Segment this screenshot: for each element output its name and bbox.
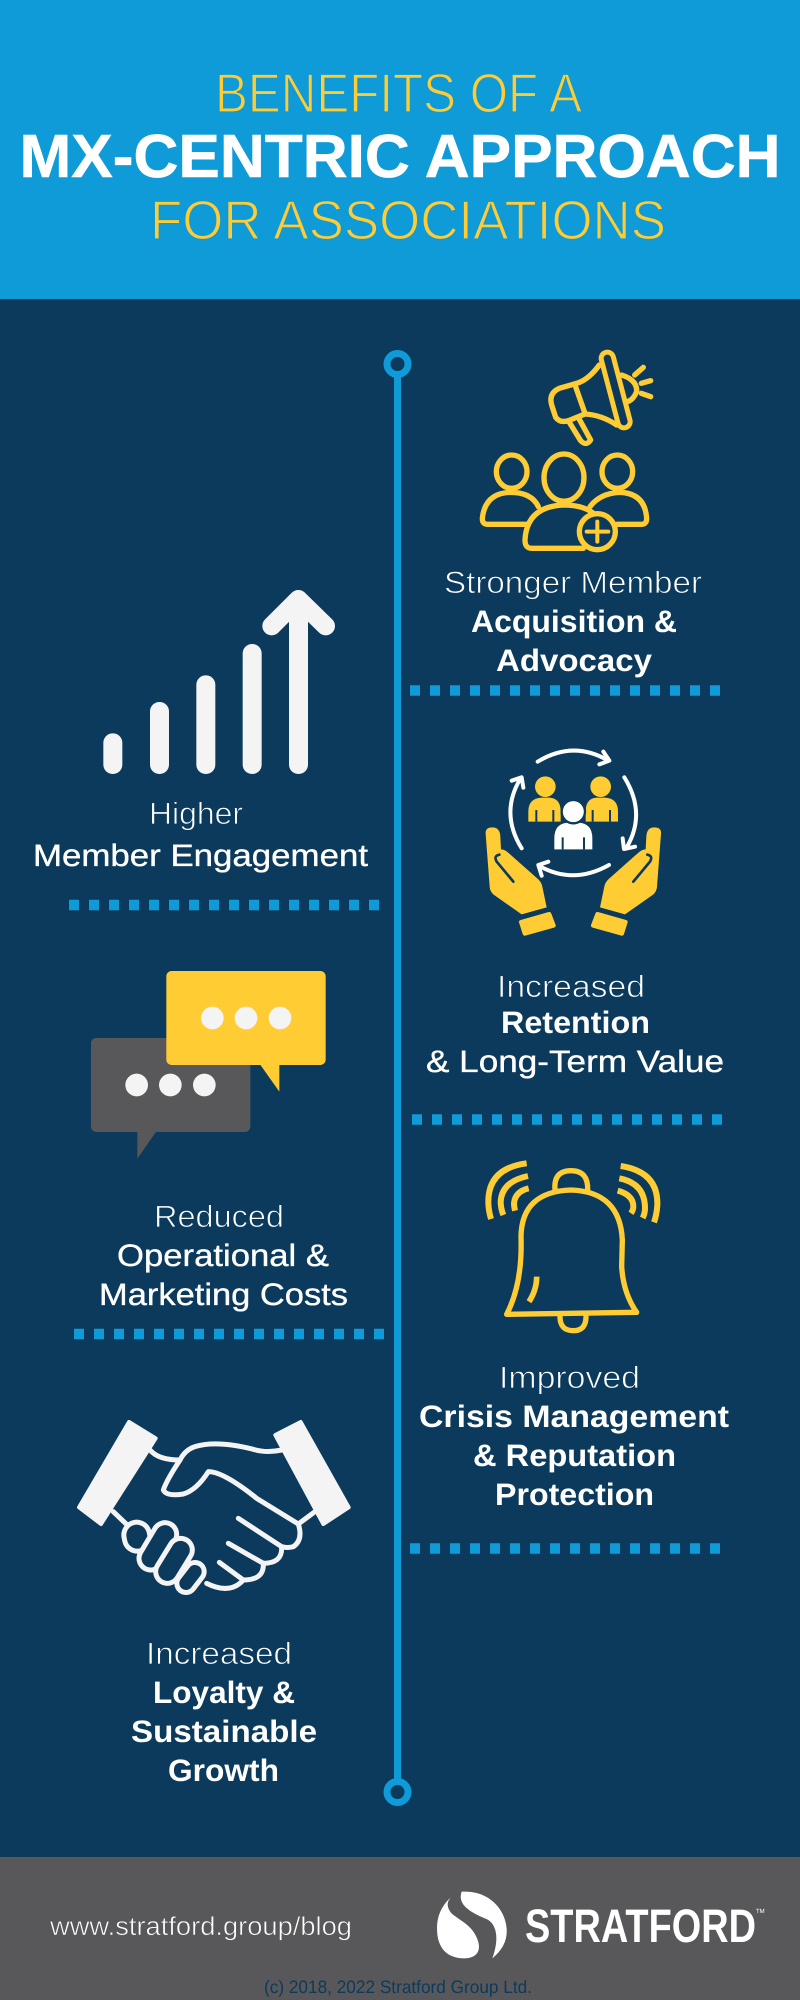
text: increased retention and long-term value: Increased — [497, 969, 645, 1004]
text: reduced operational and marketing costs: Marketing Costs — [99, 1277, 348, 1312]
copyright: (c) 2018, 2022 Stratford Group Ltd. — [264, 1977, 532, 1997]
text: increased loyalty and sustainable growth: Increased — [146, 1636, 292, 1671]
divider 1 right — [410, 685, 720, 696]
title line 1: BENEFITS OF A — [215, 62, 582, 124]
header panel — [0, 0, 800, 299]
divider 3 right — [410, 1543, 720, 1554]
icon: handshake — [79, 1422, 349, 1588]
text: improved crisis management and reputation protection: Crisis Management — [419, 1399, 729, 1434]
icon: megaphone — [551, 358, 651, 444]
text: increased loyalty and sustainable growth: Growth — [168, 1753, 279, 1788]
icon: rising bars with arrow — [103, 599, 326, 774]
logo mark — [437, 1892, 507, 1958]
title line 2: MX-CENTRIC APPROACH — [20, 122, 780, 190]
title line 3: FOR ASSOCIATIONS — [150, 189, 666, 251]
text: increased loyalty and sustainable growth — [131, 1636, 317, 1788]
text: increased loyalty and sustainable growth: Loyalty & — [153, 1675, 295, 1710]
text: increased retention and long-term value: & Long-Term Value — [426, 1044, 724, 1079]
divider 1 left — [69, 900, 379, 910]
text: reduced operational and marketing costs: Operational & — [117, 1238, 329, 1273]
trademark: TM — [756, 1908, 765, 1915]
text: stronger member acquisition and advocacy: Stronger Member — [444, 565, 702, 600]
footer url: www.stratford.group/blog — [49, 1911, 352, 1941]
text: stronger member acquisition and advocacy: Advocacy — [496, 643, 653, 678]
text: increased loyalty and sustainable growth: Sustainable — [131, 1714, 317, 1749]
text: improved crisis management and reputation protection — [419, 1360, 729, 1512]
text: stronger member acquisition and advocacy: Acquisition & — [471, 604, 677, 639]
text: improved crisis management and reputation protection: Protection — [495, 1477, 654, 1512]
text: higher member engagement: Higher — [149, 796, 243, 831]
text: higher member engagement — [33, 796, 368, 873]
icon: hands holding people in a cycle — [486, 751, 661, 936]
text: higher member engagement: Member Engagement — [33, 838, 368, 873]
text: reduced operational and marketing costs — [99, 1199, 348, 1312]
text: increased retention and long-term value: Retention — [501, 1005, 650, 1040]
divider 2 left — [74, 1329, 384, 1339]
text: reduced operational and marketing costs: Reduced — [154, 1199, 284, 1234]
text: improved crisis management and reputation protection: Improved — [499, 1360, 640, 1395]
footer panel — [0, 1857, 800, 2000]
divider 2 right — [412, 1114, 722, 1125]
icon: member group with plus — [482, 454, 647, 550]
central timeline — [387, 354, 408, 1802]
text: improved crisis management and reputation protection: & Reputation — [473, 1438, 676, 1473]
icon: chat bubbles — [91, 971, 326, 1159]
text: increased retention and long-term value — [426, 969, 724, 1079]
text: stronger member acquisition and advocacy — [444, 565, 702, 678]
icon: ringing bell — [488, 1163, 657, 1331]
